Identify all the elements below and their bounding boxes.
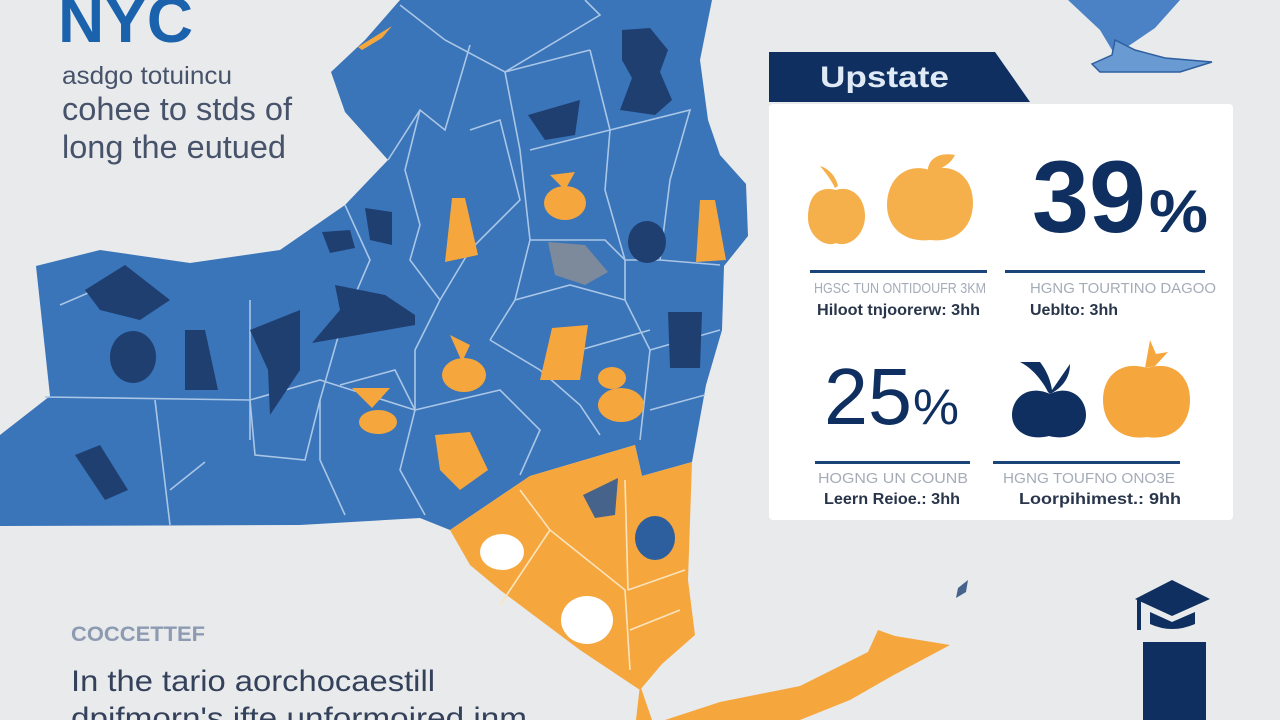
map icon: grey patch (548, 242, 608, 285)
icon: graduation cap and bar (1135, 580, 1210, 720)
icon: orange apples top (808, 154, 973, 244)
map icons: orange apples and bags (352, 172, 726, 490)
intro text: cohee to stds of (62, 91, 292, 127)
stat captions: HGNG TOUFNO ONO3E (1003, 470, 1175, 487)
intro text: long the eutued (62, 129, 286, 165)
stat captions: Hiloot tnjoorerw: 3hh (817, 302, 980, 319)
panel header: Upstate (769, 52, 1030, 102)
stat captions (810, 270, 1216, 508)
panel: stats (769, 104, 1233, 520)
stat captions: Loorpihimest.: 9hh (1019, 491, 1181, 508)
stat: 25%: % (913, 379, 959, 435)
stat captions: HGNG TOURTINO DAGOO (1030, 280, 1216, 297)
panel header: Upstate: Upstate (820, 61, 949, 94)
stat: 25% (824, 352, 959, 441)
stat captions: HGSC TUN ONTIDOUFR 3KM (814, 280, 986, 297)
bottom left heading: COCCETTEF (71, 623, 205, 646)
icon: navy and orange apples (1012, 340, 1190, 438)
bottom left text: In the tario aorchocaestill (71, 665, 435, 698)
top right decorative blue shape (1068, 0, 1212, 72)
small speck (956, 580, 968, 598)
map: NYC region (450, 445, 950, 720)
map: upstate region (0, 0, 748, 530)
intro text (62, 62, 292, 165)
stat: 25%: 25 (824, 352, 912, 441)
map icons: NYC region apples (480, 478, 675, 644)
stat captions: HOGNG UN COUNB (818, 470, 968, 487)
stat: 39%: 39 (1032, 140, 1146, 254)
stat captions: Ueblto: 3hh (1030, 302, 1118, 319)
stat captions: Leern Reioe.: 3hh (824, 491, 960, 508)
bottom left text (71, 665, 527, 720)
stat: 39% (1032, 140, 1208, 254)
intro text: asdgo totuincu (62, 62, 232, 90)
stat: 39%: % (1149, 178, 1208, 245)
map icons: dark silhouettes (75, 28, 702, 500)
